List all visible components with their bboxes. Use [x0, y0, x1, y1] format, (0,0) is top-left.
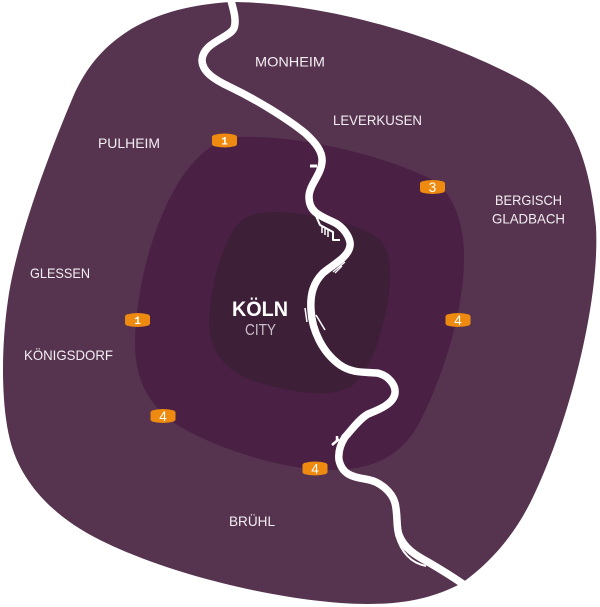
river detail: small jetty at top: [310, 164, 317, 168]
label: Bergisch: BERGISCH: [495, 192, 562, 208]
label: Pulheim: PULHEIM: [98, 135, 160, 151]
title: Köln: KÖLN: [232, 298, 288, 321]
label: Königsdorf: KÖNIGSDORF: [24, 346, 113, 363]
badge: 4 east: [446, 313, 470, 328]
label: Leverkusen: LEVERKUSEN: [333, 112, 422, 128]
badge: 4 south-west: 4: [159, 409, 167, 424]
label: Monheim: MONHEIM: [255, 54, 325, 70]
label: Gladbach: GLADBACH: [492, 210, 565, 226]
river detail: branch near centre: [333, 262, 345, 273]
river detail: side channel south: [396, 535, 426, 566]
badge: 4 south: [302, 462, 328, 476]
badge: 3 north-east: 3: [429, 180, 436, 195]
badge: 4 south: 4: [311, 462, 319, 476]
badge: 1 west: [125, 313, 150, 328]
badge: 1 north: 1: [221, 136, 228, 148]
badge: 1 west: 1: [134, 316, 141, 328]
river detail: harbour comb: [322, 227, 328, 237]
subtitle: City: CITY: [245, 322, 276, 339]
river detail: harbour piers north: [316, 216, 340, 240]
river Rhine: [202, 0, 463, 584]
badge: 4 east: 4: [454, 313, 462, 328]
inner region: city centre: [209, 212, 390, 393]
badge: 1 north: [212, 134, 237, 148]
label: Glessen: GLESSEN: [30, 265, 90, 281]
badge: 4 south-west: [150, 409, 176, 424]
middle region: greater city ring: [135, 137, 464, 470]
river detail: island west: [305, 308, 307, 322]
label: Brühl: BRÜHL: [229, 512, 275, 529]
river detail: jetty south: [332, 436, 339, 445]
river detail: island east: [316, 315, 325, 330]
badge: 3 north-east: [420, 180, 445, 195]
